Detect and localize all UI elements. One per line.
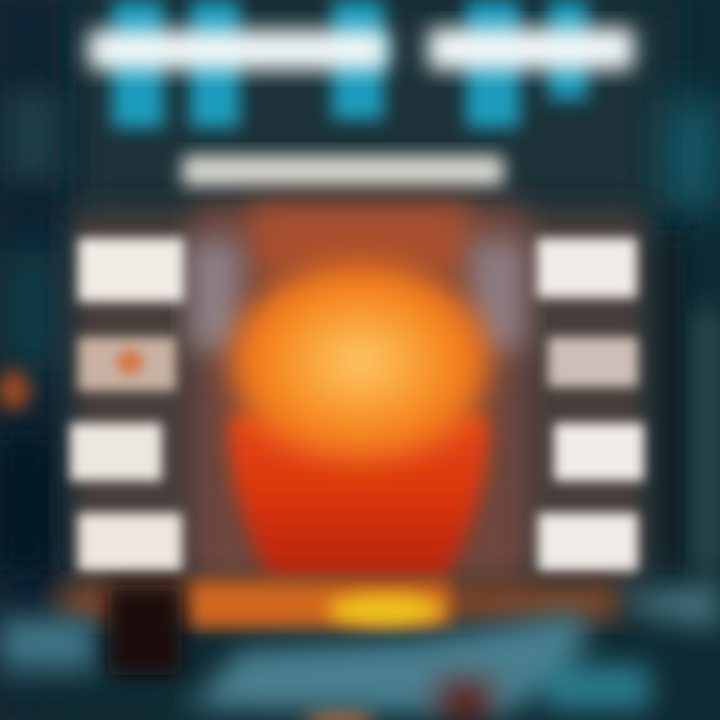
left cards — [70, 238, 184, 571]
desk glow — [60, 582, 620, 720]
subtitle — [182, 155, 504, 187]
foreground books — [0, 582, 720, 720]
glowing sphere — [228, 262, 490, 578]
right cards — [537, 238, 644, 571]
title — [88, 28, 634, 70]
title columns — [112, 0, 588, 128]
central panel — [72, 205, 647, 580]
dark cup — [108, 585, 182, 675]
